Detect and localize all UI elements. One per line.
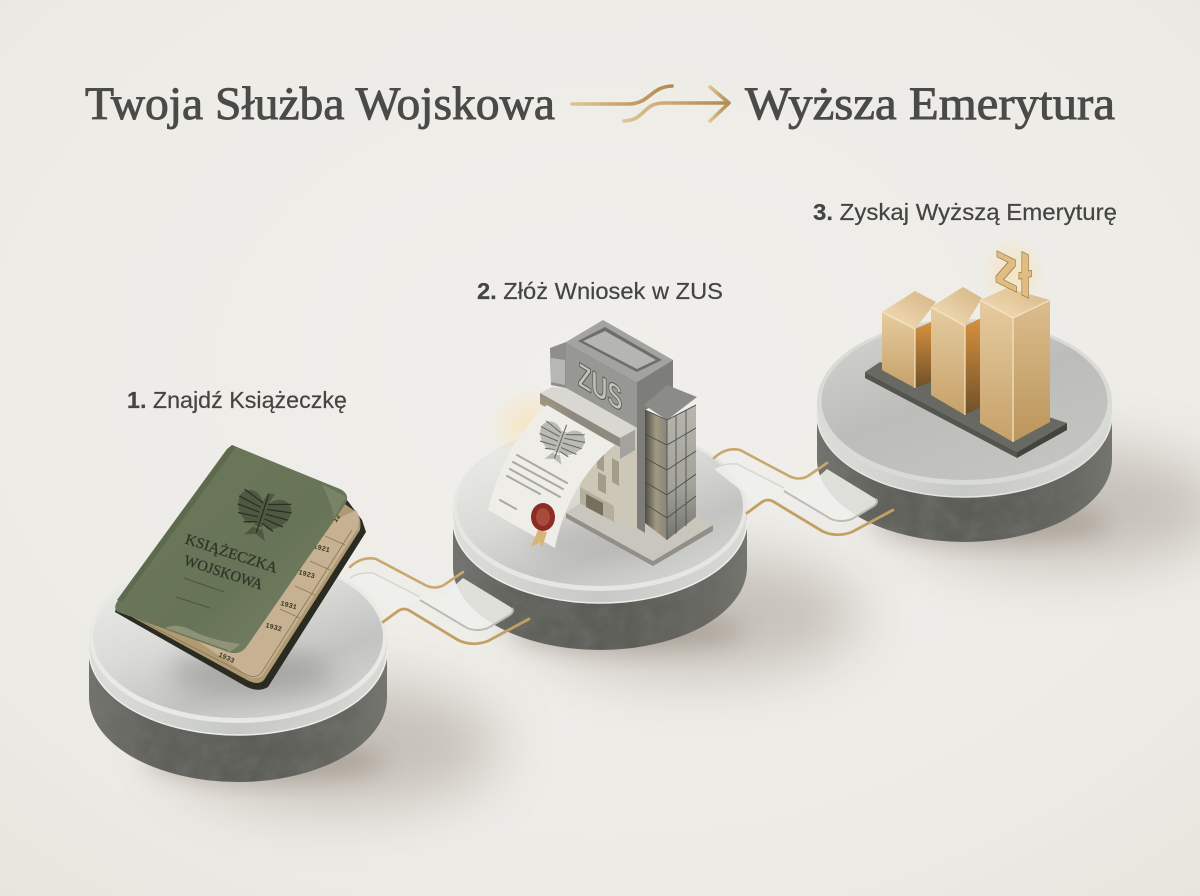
booklet page numbers xyxy=(217,513,343,666)
arrow: gold split arrow xyxy=(572,86,729,121)
zloty symbol: zł xyxy=(994,227,1032,313)
bar 1 xyxy=(882,291,936,388)
icon: military booklet xyxy=(115,445,366,690)
title right: pension: Wyższa Emerytura xyxy=(745,78,1115,130)
ribbon xyxy=(531,530,547,548)
title xyxy=(85,78,1115,130)
booklet page numbers: 1923 xyxy=(297,569,316,581)
booklet cover xyxy=(115,445,347,653)
document xyxy=(488,405,615,548)
light glow xyxy=(488,387,572,463)
wax seal xyxy=(531,503,555,531)
ground shadows xyxy=(145,449,1200,807)
step 2 label: 2. Złóż Wniosek w ZUS xyxy=(477,278,723,304)
booklet page numbers: 1921 xyxy=(312,543,331,555)
booklet page numbers: 12 xyxy=(332,513,343,525)
booklet eagle emblem xyxy=(229,484,295,546)
disc 3: concrete and glass xyxy=(817,319,1112,542)
booklet page numbers: 1933 xyxy=(217,651,235,666)
title left: service: Twoja Służba Wojskowa xyxy=(85,78,555,130)
disc 2: concrete and glass xyxy=(453,425,747,650)
building base plate xyxy=(566,513,713,566)
booklet title: WOJSKOWA xyxy=(182,553,265,594)
booklet page numbers: 1931 xyxy=(279,600,298,612)
zloty glow xyxy=(979,236,1047,308)
chart base plate xyxy=(865,362,1067,458)
bar 2 xyxy=(931,287,982,415)
icon: ZUS building xyxy=(488,320,713,566)
building back block xyxy=(550,342,566,388)
document text lines xyxy=(500,455,567,509)
booklet title xyxy=(182,532,279,594)
building glass tower xyxy=(644,385,697,420)
icon: gold bar chart xyxy=(865,227,1067,458)
booklet title: KSIĄŻECZKA xyxy=(183,532,279,577)
building facade xyxy=(580,428,645,533)
document eagle xyxy=(531,417,588,470)
connector 1 to 2 xyxy=(350,558,529,644)
ZUS sign: ZUS xyxy=(578,355,622,420)
building tower xyxy=(566,320,673,382)
building canopy xyxy=(540,387,637,438)
step 1 label: 1. Znajdź Książeczkę xyxy=(127,387,347,413)
bar 3 xyxy=(980,288,1050,442)
booklet page numbers: 1932 xyxy=(264,622,283,634)
booklet back cover and pages xyxy=(115,500,366,690)
disc 1: concrete and glass xyxy=(89,553,387,782)
connector 2 to 3 xyxy=(714,449,893,535)
step 3 label: 3. Zyskaj Wyższą Emeryturę xyxy=(813,199,1117,225)
